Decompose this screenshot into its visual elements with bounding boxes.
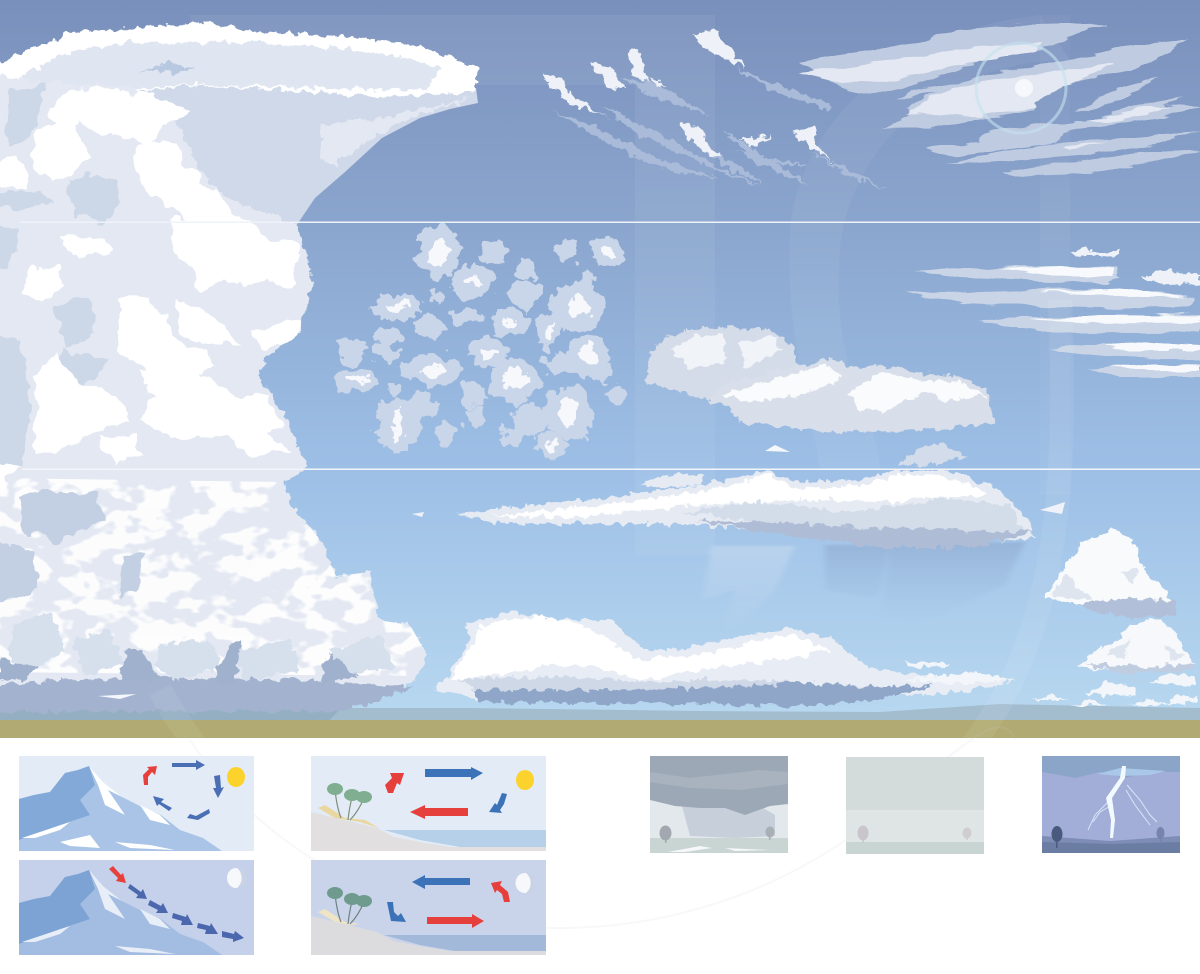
panel: mountain wind by night	[19, 860, 254, 955]
bright cloud	[1097, 768, 1166, 776]
altostratus right puffs	[1067, 248, 1200, 285]
medium cumulus right highlights	[720, 365, 985, 410]
palm fronds	[327, 887, 372, 907]
stratocumulus base shadow	[472, 682, 935, 706]
ground	[650, 838, 788, 853]
cumulonimbus lower lobes shade	[8, 612, 395, 680]
puddles	[668, 846, 770, 852]
beach	[311, 812, 546, 851]
base white wisp	[98, 694, 136, 699]
sun	[516, 770, 534, 790]
dune	[318, 805, 379, 828]
lightning branches	[1088, 785, 1157, 830]
panel: sea breeze by day	[311, 756, 546, 851]
medium cumulus left highlights	[668, 335, 780, 368]
sun	[227, 767, 245, 787]
altitude line upper	[20, 222, 1200, 223]
moon shadow	[237, 868, 246, 888]
mountain snow	[22, 766, 175, 850]
panel background	[846, 757, 984, 854]
altostratus pale bands	[905, 266, 1200, 377]
tree left	[858, 826, 868, 843]
cloud: cumulus upper right	[1045, 530, 1177, 618]
cloud: stratocumulus low	[435, 612, 1015, 706]
cloud: cirrus tufts	[540, 30, 890, 190]
small cloud puff	[765, 445, 790, 452]
fog band	[846, 810, 984, 842]
warm arrow	[143, 766, 157, 785]
stratus wisp left	[640, 474, 705, 487]
cirrus tails	[552, 68, 890, 190]
cloud: altostratus bands	[905, 248, 1200, 377]
stratus shadow base	[695, 520, 1035, 548]
ground	[846, 842, 984, 854]
cumulonimbus lower texture	[0, 478, 422, 676]
cumulus body	[1078, 618, 1196, 670]
cloud: medium cumulus	[645, 327, 995, 433]
cumulonimbus anvil underside	[120, 80, 478, 260]
altostratus white bands	[1000, 266, 1200, 371]
fragments left	[412, 512, 424, 517]
mountain dark face	[19, 766, 95, 840]
cirrostratus pale sheets	[799, 23, 1200, 175]
cumulus shadow	[1085, 664, 1196, 673]
cumulonimbus white billows upper	[0, 85, 300, 500]
cumulonimbus anvil shade	[20, 42, 440, 95]
cirrus heads	[540, 30, 835, 162]
panel background	[19, 860, 254, 955]
cumulus shade	[1105, 640, 1185, 662]
watermark big ring	[160, 300, 1062, 927]
cumulonimbus base shadow	[0, 678, 415, 712]
cumulus shadow	[1080, 598, 1177, 618]
tree right	[1156, 827, 1164, 843]
stratocumulus right wisp	[900, 661, 1012, 684]
sea breeze arrows	[412, 875, 470, 889]
dune	[318, 909, 360, 925]
panel background	[19, 756, 254, 851]
tree left	[660, 826, 672, 843]
palm fronds	[327, 783, 372, 803]
tree left	[1052, 826, 1062, 848]
panel: mountain wind by day	[19, 756, 254, 851]
rain curtain	[682, 806, 775, 838]
cloud: cumulus lower right	[1078, 618, 1196, 673]
land breeze arrows	[425, 767, 483, 780]
stratocumulus mid shade	[460, 676, 880, 694]
fragments right	[1040, 502, 1065, 514]
horizon haze	[0, 704, 1200, 721]
storm sky	[1042, 756, 1180, 778]
beach	[311, 916, 546, 955]
mountain	[19, 870, 222, 955]
cumulonimbus crevices	[0, 640, 358, 684]
watermark ring edge	[190, 727, 1015, 928]
halo ring	[976, 43, 1066, 133]
ground strip	[0, 720, 1200, 738]
moon	[227, 868, 245, 888]
medium cumulus right part	[710, 358, 995, 433]
lightning bolt	[1106, 766, 1126, 838]
cloud: tiny cumulus row	[1030, 674, 1198, 706]
dark rain columns	[825, 542, 1025, 622]
wind arrows	[153, 760, 224, 820]
storm cloud light layers	[650, 770, 788, 790]
light rain columns	[702, 546, 795, 632]
mountain	[19, 766, 222, 851]
panel background	[1042, 756, 1180, 853]
cloud: stratus with virga	[412, 443, 1065, 548]
panel: lightning	[1042, 756, 1180, 853]
stratocumulus body	[435, 612, 1015, 704]
palm trunks	[335, 894, 364, 924]
haze under storm	[0, 698, 350, 720]
mountain dark face	[19, 870, 95, 944]
anvil dark detail	[140, 62, 196, 73]
cumulonimbus anvil top rim	[0, 22, 478, 120]
cold arrows	[128, 884, 244, 942]
cloud: altocumulus patches	[334, 224, 624, 459]
sky background	[0, 0, 1200, 720]
anvil pale streak	[322, 98, 470, 165]
panel background	[650, 756, 788, 853]
ground hill	[1042, 836, 1180, 845]
cloud: rain virga	[702, 542, 1025, 632]
cloud: cumulonimbus	[0, 22, 478, 712]
stratocumulus highlights	[450, 616, 830, 680]
panel: fog	[846, 757, 984, 854]
moon shadow	[526, 873, 536, 893]
storm cloud	[650, 756, 788, 815]
altocumulus shade	[334, 224, 624, 459]
stratus wisp top	[895, 443, 966, 466]
cloud: cirrostratus with halo	[799, 23, 1200, 175]
ground	[1042, 842, 1180, 853]
stratus white upper	[490, 474, 990, 518]
cumulus body	[1045, 530, 1172, 606]
sea	[384, 830, 546, 847]
warm arrow	[109, 866, 126, 883]
stratus mid shade	[680, 498, 1025, 535]
sea	[384, 935, 546, 952]
panel: sea breeze by night	[311, 860, 546, 955]
sun behind cirrostratus	[1015, 79, 1033, 97]
cumulonimbus lower shade	[0, 495, 145, 610]
tree right	[962, 828, 972, 840]
cirrostratus bright sheets	[799, 42, 1171, 150]
tree right	[766, 826, 774, 840]
medium cumulus left part	[645, 327, 800, 402]
watermark bands on sky	[190, 15, 1070, 555]
mountain snow	[22, 870, 175, 954]
cumulonimbus shade patches	[0, 85, 120, 480]
panel background	[311, 756, 546, 851]
moon	[516, 873, 534, 893]
altocumulus highlights	[346, 238, 614, 451]
panel background	[311, 860, 546, 955]
panel: rain storm	[650, 756, 788, 853]
cumulonimbus main body	[0, 70, 427, 696]
palm trunks	[335, 790, 364, 820]
stratus main	[455, 470, 1035, 545]
altitude line lower	[22, 468, 1200, 470]
cumulus shade	[1050, 570, 1140, 600]
